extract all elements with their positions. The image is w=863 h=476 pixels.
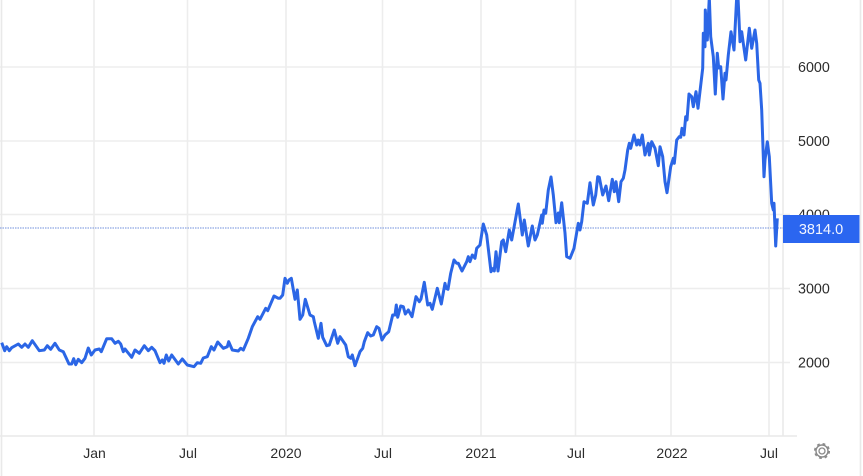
x axis labels: Jul [179,445,197,461]
current value badge: 3814.0 [799,222,843,238]
x axis labels: 2022 [656,445,688,461]
current value badge [783,215,860,243]
x axis labels: Jul [374,445,392,461]
x axis labels: 2020 [270,445,302,461]
icon: settings gear [815,444,829,458]
x axis labels: 2021 [465,445,497,461]
y axis labels: 3000 [798,282,830,298]
y axis labels [798,60,830,372]
x axis labels: Jan [83,445,106,461]
y axis labels: 4000 [798,208,830,224]
y axis labels: 6000 [798,60,830,76]
x axis labels [83,445,778,461]
y axis labels: 2000 [798,356,830,372]
y axis labels: 5000 [798,134,830,150]
x axis labels: Jul [567,445,585,461]
x axis labels: Jul [760,445,778,461]
price line [2,0,777,367]
dotted current value line [0,227,784,229]
